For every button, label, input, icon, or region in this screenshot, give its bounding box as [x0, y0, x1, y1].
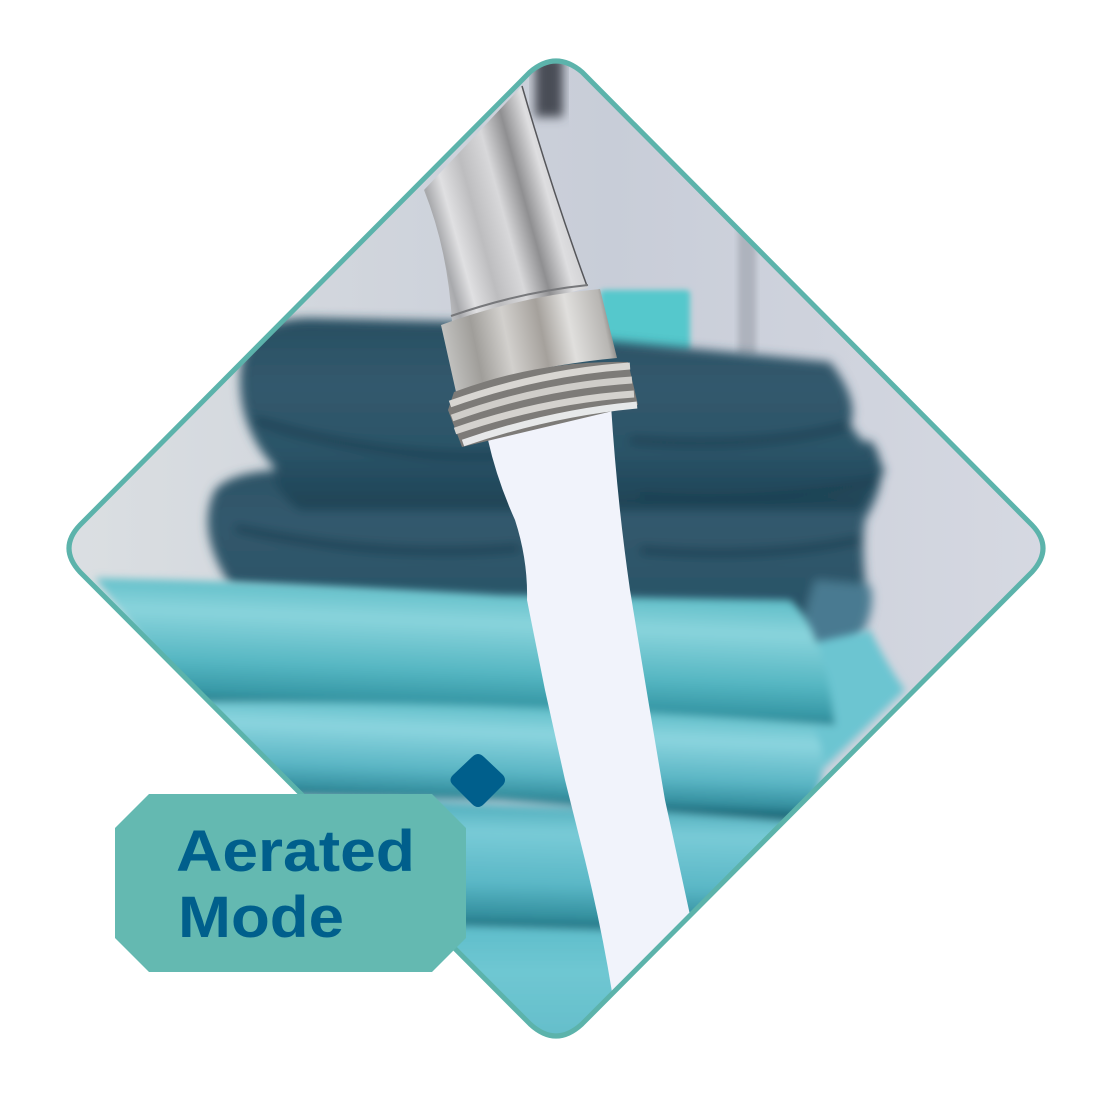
- light towel stack: [95, 578, 905, 1050]
- label badge: [115, 794, 466, 972]
- faucet pipe: [424, 86, 588, 322]
- water stream: [488, 405, 690, 992]
- faucet collar: [441, 289, 617, 392]
- dark towel stack: [208, 318, 885, 668]
- faucet threads: [448, 362, 638, 447]
- diamond outline: [69, 61, 1043, 1036]
- label text: Aerated: [176, 819, 415, 884]
- small diamond accent: [450, 754, 505, 807]
- label badge: Mode: [178, 885, 344, 950]
